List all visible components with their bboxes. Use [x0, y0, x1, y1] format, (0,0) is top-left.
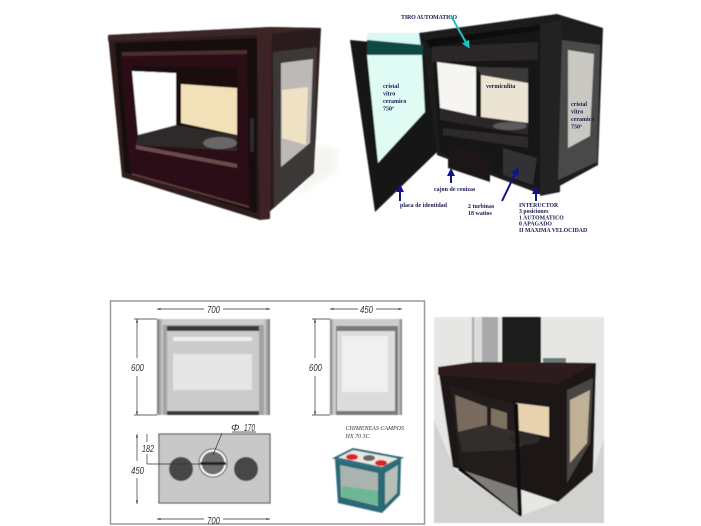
label: cristal right: cristal — [571, 102, 587, 108]
arrow: inteructor — [535, 189, 537, 201]
dimension labels — [131, 305, 373, 526]
label: cristal right: 750° — [571, 124, 583, 130]
label: inteructor: 3 posiciones — [519, 209, 549, 215]
label: cristal left: cristal — [383, 84, 399, 90]
photo: installed stove with flue pipes — [434, 317, 604, 523]
label: cristal left: 750° — [383, 106, 395, 112]
label: cristal right: vitro — [571, 110, 583, 116]
arrow: tiro automatico — [451, 16, 468, 46]
drawing: top view — [159, 434, 270, 503]
label: inteructor: 1 AUTOMATICO — [519, 215, 564, 221]
dimension labels: 600 — [309, 363, 322, 374]
label: cajon de cenizas: cajon de cenizas — [434, 187, 476, 193]
label: turbinas: 18 watios — [468, 211, 492, 217]
label: cristal right: ceramico — [571, 117, 594, 123]
label: inteructor: INTERUCTOR — [519, 203, 558, 209]
label: inteructor: 0 APAGADO — [519, 222, 552, 228]
drawing: side view — [330, 319, 402, 415]
dimension labels: 182 — [142, 444, 154, 455]
label: model name: HX 70 3C — [344, 434, 370, 440]
label: turbinas: 2 turbinas — [468, 204, 494, 210]
drawing: front view — [157, 319, 270, 415]
label: model name: CHIMENEAS CAMPOS — [346, 426, 404, 432]
dimension lines — [134, 309, 402, 519]
dimension labels: 170 — [244, 423, 255, 434]
label: tiro automatico: TIRO AUTOMATICO — [401, 15, 457, 21]
label: cristal left: ceramico — [383, 99, 406, 105]
photo: closed stove, front three-quarter view — [108, 27, 337, 220]
arrow: cajon — [450, 171, 452, 183]
photo: open stove with annotations — [350, 14, 603, 234]
dimension labels: 700 — [207, 305, 220, 316]
stove body with open door — [350, 14, 603, 212]
panel: technical drawings — [110, 301, 424, 526]
label: vermiculita: vermiculita — [486, 84, 515, 90]
label: inteructor: II MAXIMA VELOCIDAD — [519, 228, 587, 234]
dimension labels: Φ — [231, 423, 239, 434]
arrow: turbinas — [502, 170, 517, 201]
dimension labels: 450 — [131, 466, 144, 477]
arrow: placa — [399, 187, 401, 201]
icon: 3D model of stove — [335, 449, 401, 513]
dimension labels: 450 — [360, 305, 373, 316]
label: cristal left: vitro — [383, 92, 395, 98]
label: placa de identidad: placa de identidad — [400, 203, 448, 209]
dimension labels: 600 — [131, 363, 144, 374]
